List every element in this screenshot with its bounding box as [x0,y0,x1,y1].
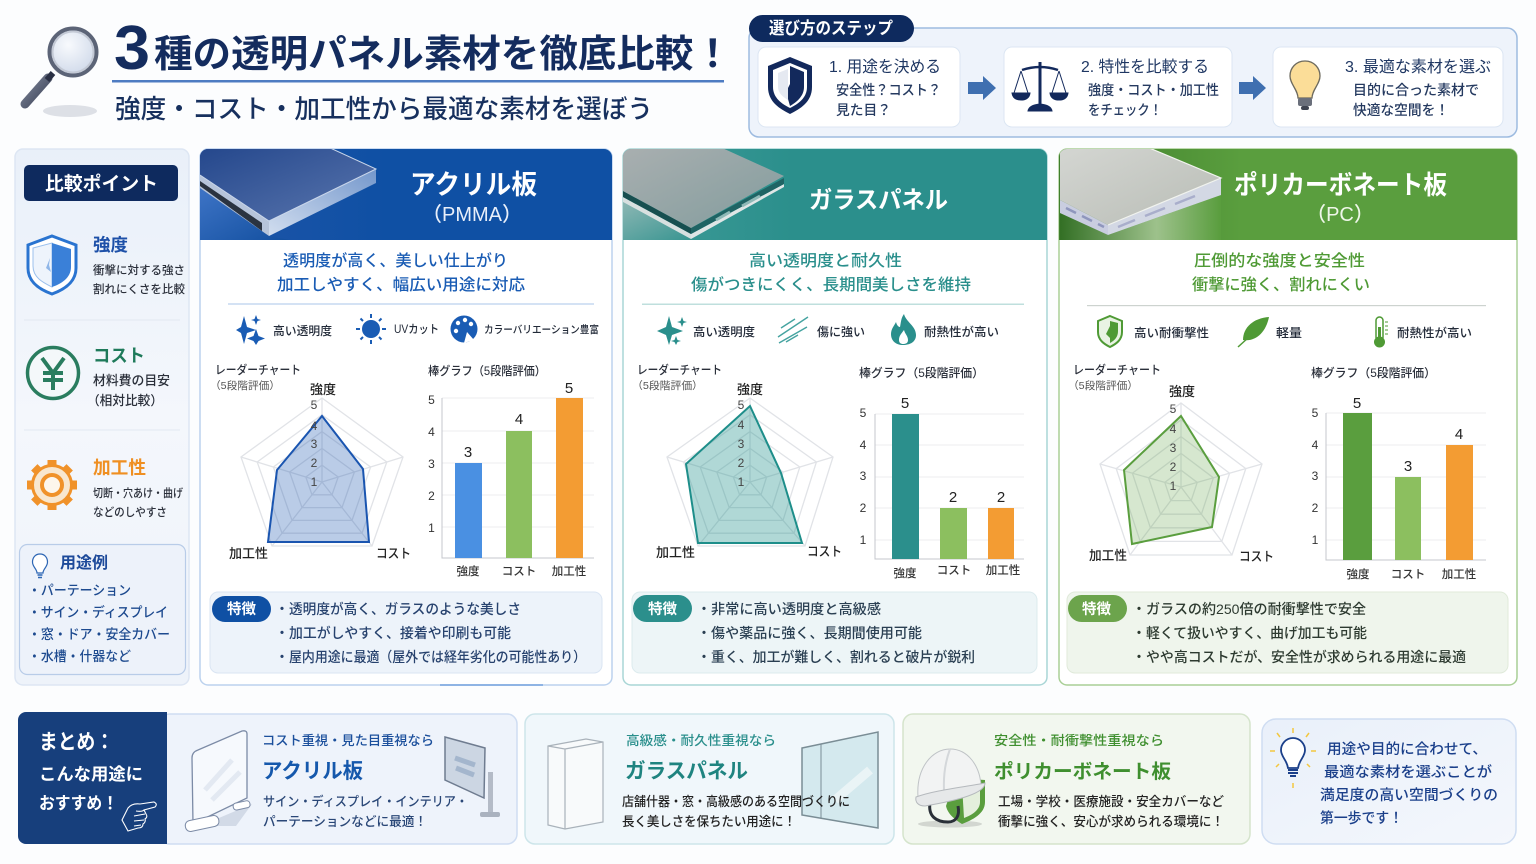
acrylic plate image [200,147,376,240]
polycarbonate features box [1067,592,1508,673]
step 1 card: 見た目？ [836,102,891,118]
polycarbonate header: ポリカーボネート板 [1234,170,1447,200]
glass feature icons: 傷に強い [817,324,865,339]
acrylic bar chart: 4 [515,411,523,428]
use cases box: 用途例 [60,554,108,572]
polycarbonate features box: ・ [1132,601,1146,617]
polycarbonate features box: 特徴 [1082,600,1111,618]
icon: flame [891,314,916,345]
acrylic feature icons: 高い透明度 [273,323,332,338]
polycarbonate header [1059,147,1517,240]
icon: magnifying glass [25,28,97,117]
acrylic bar chart: 5 [565,380,573,397]
polycarbonate bar chart: 4 [1455,426,1463,443]
icon: leaf [1238,317,1269,347]
polycarbonate bar chart: 5 [1312,406,1319,420]
glass radar chart: 4 [738,418,745,432]
polycarbonate bar chart: 1 [1312,533,1319,547]
arrow: step 1 to 2 [968,76,996,100]
icon: yen coin [28,348,78,398]
glass radar chart: 加工性 [656,545,695,560]
icon: balance scale [1012,62,1068,111]
step 2 card: をチェック！ [1088,102,1162,118]
polycarbonate radar chart: 1 [1170,479,1177,493]
icon: green shield [1098,316,1122,347]
acrylic feature icons: カラーバリエーション豊富 [484,323,599,336]
panel: polycarbonate [1059,147,1517,685]
polycarbonate feature icons: 軽量 [1276,326,1302,340]
glass bar chart: 5 [901,395,909,412]
step 1 card: 1. 用途を決める [829,58,941,76]
point: strength: 衝撃に対する強さ [93,263,185,277]
icon: shield [768,57,812,114]
closing message card: 最適な素材を選ぶことが [1324,763,1493,781]
glass radar chart: 強度 [737,382,763,397]
recommendation card: glass: 店舗什器・窓・高級感のある空間づくりに [622,794,850,809]
illustration: safety helmet and shield [916,749,985,828]
panel: acrylic [200,147,612,686]
glass bar chart: 3 [860,469,867,483]
step 3 card: 目的に合った素材で [1353,82,1479,98]
polycarbonate tagline [1192,252,1370,294]
acrylic features box [210,592,602,673]
panel: glass [623,147,1047,685]
acrylic bar chart: 強度 [456,564,480,578]
glass radar chart: （5段階評価） [632,379,703,392]
steps label [749,15,914,42]
icon: sun [356,314,386,344]
panel: selection steps [749,15,1517,137]
polycarbonate radar chart: （5段階評価） [1068,379,1138,392]
glass radar chart: 5 [738,398,745,412]
polycarbonate tagline: 圧倒的な強度と安全性 [1194,252,1365,270]
polycarbonate bar chart [1311,365,1486,581]
acrylic bar chart: コスト [502,566,536,578]
acrylic features box: ・ [275,601,289,617]
steps label: 選び方のステップ [769,18,893,38]
acrylic features box: 加工がしやすく、接着や印刷も可能 [289,625,511,641]
step 2 card: 2. 特性を比較する [1081,58,1209,76]
step 3 card: 3. 最適な素材を選ぶ [1345,58,1491,76]
polycarbonate header: （PC） [1306,203,1374,226]
glass tagline: 高い透明度と耐久性 [749,252,902,270]
glass radar chart: 2 [738,456,745,470]
acrylic bar chart: 3 [464,444,472,461]
polycarbonate radar chart: 強度 [1169,384,1195,399]
acrylic features box: 透明度が高く、ガラスのような美しさ [289,601,521,617]
acrylic bar chart: 加工性 [552,564,586,578]
illustration: acrylic partition [184,731,252,832]
polycarbonate bar chart: 4 [1312,438,1319,452]
glass bar chart: 2 [949,489,957,506]
illustration: sign stand [445,737,500,817]
acrylic feature icons: UVカット [394,323,439,336]
point: strength: 割れにくさを比較 [93,282,185,296]
polycarbonate radar chart: 4 [1170,422,1177,436]
use cases box: ・サイン・ディスプレイ [28,604,168,620]
acrylic header: （PMMA） [422,203,522,226]
acrylic radar chart: （5段階評価） [210,379,280,392]
step 2 card [1004,47,1232,127]
panel: comparison points sidebar [15,149,189,685]
closing message card: 第一歩です！ [1320,809,1403,827]
polycarbonate tagline: 衝撃に強く、割れにくい [1192,276,1370,294]
polycarbonate features box: 軽くて扱いやすく、曲げ加工も可能 [1146,625,1367,641]
step 3 card: 快適な空間を！ [1353,102,1449,118]
polycarbonate features box: ・ [1132,649,1146,665]
closing message card [1262,719,1516,844]
sidebar heading: 比較ポイント [45,172,158,195]
acrylic header [200,147,612,240]
use cases box [20,544,186,674]
summary heading box: まとめ： [39,731,114,754]
acrylic tagline: 加工しやすく、幅広い用途に対応 [277,276,525,294]
acrylic bar chart: 棒グラフ（5段階評価） [428,363,546,378]
closing message card: 満足度の高い空間づくりの [1320,787,1498,804]
arrow: step 2 to 3 [1239,76,1266,100]
glass features box: 非常に高い透明度と高級感 [711,601,881,617]
polycarbonate radar chart [1068,362,1274,564]
acrylic features box: 屋内用途に最適（屋外では経年劣化の可能性あり） [289,649,586,665]
recommendation card: acrylic: サイン・ディスプレイ・インテリア・ [263,794,468,809]
glass bar chart: 4 [860,438,867,452]
acrylic radar chart: レーダーチャート [215,362,301,377]
polycarbonate feature icons: 耐熱性が高い [1397,325,1472,340]
step 1 card: 安全性？コスト？ [836,82,941,98]
polycarbonate bar chart: 3 [1404,458,1412,475]
glass bar chart: コスト [937,565,971,577]
glass features box: 傷や薬品に強く、長期間使用可能 [711,625,922,641]
closing message card: 用途や目的に合わせて、 [1327,741,1487,758]
polycarbonate bar chart: 3 [1312,469,1319,483]
point: cost: コスト [93,346,145,366]
icon: bulb with rays [1270,728,1316,788]
glass features box: 重く、加工が難しく、割れると破片が鋭利 [711,649,975,665]
recommendation card: acrylic: アクリル板 [262,760,363,783]
recommendation card: glass: ガラスパネル [625,760,748,783]
glass features box: ・ [697,601,711,617]
glass radar chart: 3 [738,437,745,451]
glass header [623,147,1047,240]
glass bar chart: 加工性 [986,563,1020,577]
glass feature icons: 高い透明度 [693,324,755,339]
polycarbonate plate image [1060,147,1221,240]
polycarbonate bar chart: 2 [1312,501,1319,515]
polycarbonate feature icons: 高い耐衝撃性 [1134,325,1209,340]
icon: pointing hand [122,802,156,831]
subtitle: 強度・コスト・加工性から最適な素材を選ぼう [115,94,653,124]
acrylic radar chart [210,362,411,561]
polycarbonate bar chart: 5 [1353,395,1361,412]
acrylic bar chart: 1 [428,521,435,535]
point: strength [28,235,185,296]
polycarbonate radar chart: 5 [1170,402,1177,416]
recommendation card: acrylic: パーテーションなどに最適！ [263,814,427,829]
acrylic radar chart: 2 [311,456,318,470]
step 3 card [1273,47,1503,127]
glass bar chart [859,365,1024,580]
point: workability: などのしやすさ [93,506,167,519]
glass radar chart: コスト [807,544,842,559]
acrylic features box: ・ [275,625,289,641]
acrylic header: アクリル板 [410,170,537,200]
point: strength: 強度 [93,235,128,255]
use cases box: ・パーテーション [28,583,131,598]
icon: light bulb [1290,61,1320,110]
acrylic bar chart: 3 [428,457,435,471]
glass bar chart: 5 [860,406,867,420]
point: cost: （相対比較） [87,393,163,408]
acrylic radar chart: コスト [376,546,411,561]
polycarbonate bar chart: コスト [1391,569,1425,581]
glass features box: 特徴 [648,600,677,618]
point: cost: 材料費の目安 [93,373,170,388]
acrylic features box: 特徴 [227,600,256,618]
acrylic radar chart: 加工性 [229,546,268,561]
polycarbonate radar chart: 3 [1170,441,1177,455]
acrylic radar chart: 3 [311,437,318,451]
acrylic bar chart [428,363,594,578]
polycarbonate feature icons [1098,316,1472,348]
polycarbonate radar chart: 加工性 [1089,548,1127,563]
recommendation card: polycarbonate: ポリカーボネート板 [994,761,1171,783]
glass features box: ・ [697,625,711,641]
polycarbonate radar chart: コスト [1239,549,1274,564]
title [114,14,732,83]
recommendation card: polycarbonate [903,714,1250,844]
point: workability: 切断・穴あけ・曲げ [93,486,183,500]
step 2 card: 強度・コスト・加工性 [1088,82,1219,98]
polycarbonate bar chart: 強度 [1346,567,1370,581]
glass features box [632,592,1037,673]
glass features box: ・ [697,649,711,665]
summary heading box: こんな用途に [39,765,143,784]
acrylic tagline [277,251,525,294]
glass bar chart: 2 [997,489,1005,506]
acrylic features box: ・ [275,649,289,665]
sidebar heading [24,165,178,201]
polycarbonate bar chart: 棒グラフ（5段階評価） [1311,365,1436,380]
glass tagline [691,252,971,294]
glass feature icons [657,314,999,345]
illustration: glass window [802,732,878,828]
acrylic radar chart: 強度 [310,382,336,397]
glass bar chart: 強度 [894,566,917,580]
step 1 card [758,47,960,127]
recommendation card: glass [525,714,894,844]
title underline [112,80,724,82]
recommendation card: polycarbonate: 衝撃に強く、安心が求められる環境に！ [998,814,1224,829]
glass radar chart: レーダーチャート [637,362,722,377]
acrylic radar chart: 5 [311,398,318,412]
polycarbonate radar chart: レーダーチャート [1073,362,1161,377]
use cases box: ・水槽・什器など [28,648,131,664]
icon: sparkles [236,315,265,345]
summary heading box: おすすめ！ [39,794,118,813]
acrylic bar chart: 2 [428,489,435,503]
polycarbonate features box: ・ [1132,625,1146,641]
polycarbonate features box: やや高コストだが、安全性が求められる用途に最適 [1146,649,1466,665]
glass radar chart [632,362,842,560]
glass header: ガラスパネル [809,187,948,214]
recommendation card: glass: 長く美しさを保ちたい用途に！ [622,814,796,829]
acrylic radar chart: 4 [311,419,318,433]
icon: thermometer [1374,317,1388,348]
polycarbonate bar chart: 加工性 [1442,567,1476,581]
point: workability [27,458,183,519]
acrylic feature icons [236,314,599,345]
icon: scratches [778,317,808,343]
glass bar chart: 1 [860,533,867,547]
polycarbonate features box: ガラスの約250倍の耐衝撃性で安全 [1146,601,1366,617]
glass plate image [623,147,784,240]
recommendation card: acrylic [160,714,517,844]
recommendation card: glass: 高級感・耐久性重視なら [626,733,776,748]
summary heading box [18,712,167,844]
acrylic bar chart: 5 [428,393,435,407]
illustration: display case [548,739,603,829]
icon: sparkles [657,316,687,345]
acrylic radar chart: 1 [311,475,318,489]
use cases box: ・窓・ドア・安全カバー [28,626,170,642]
point: cost [28,346,170,408]
title: 3 [114,14,150,83]
acrylic bar chart: 4 [428,425,435,439]
glass bar chart: 棒グラフ（5段階評価） [859,365,984,380]
title: 種の透明パネル素材を徹底比較！ [154,34,732,76]
glass radar chart: 1 [738,475,745,489]
icon: outline bulb [32,554,48,578]
recommendation card: acrylic: コスト重視・見た目重視なら [262,733,434,748]
icon: blue shield [28,236,76,294]
recommendation card: polycarbonate: 工場・学校・医療施設・安全カバーなど [998,794,1224,809]
glass bar chart: 2 [860,501,867,515]
glass feature icons: 耐熱性が高い [924,324,999,339]
icon: gear [27,460,77,510]
recommendation card: polycarbonate: 安全性・耐衝撃性重視なら [994,733,1164,748]
acrylic tagline: 透明度が高く、美しい仕上がり [283,251,508,270]
point: workability: 加工性 [93,458,146,478]
icon: palette [450,316,478,343]
glass tagline: 傷がつきにくく、長期間美しさを維持 [691,275,971,294]
polycarbonate radar chart: 2 [1170,460,1177,474]
